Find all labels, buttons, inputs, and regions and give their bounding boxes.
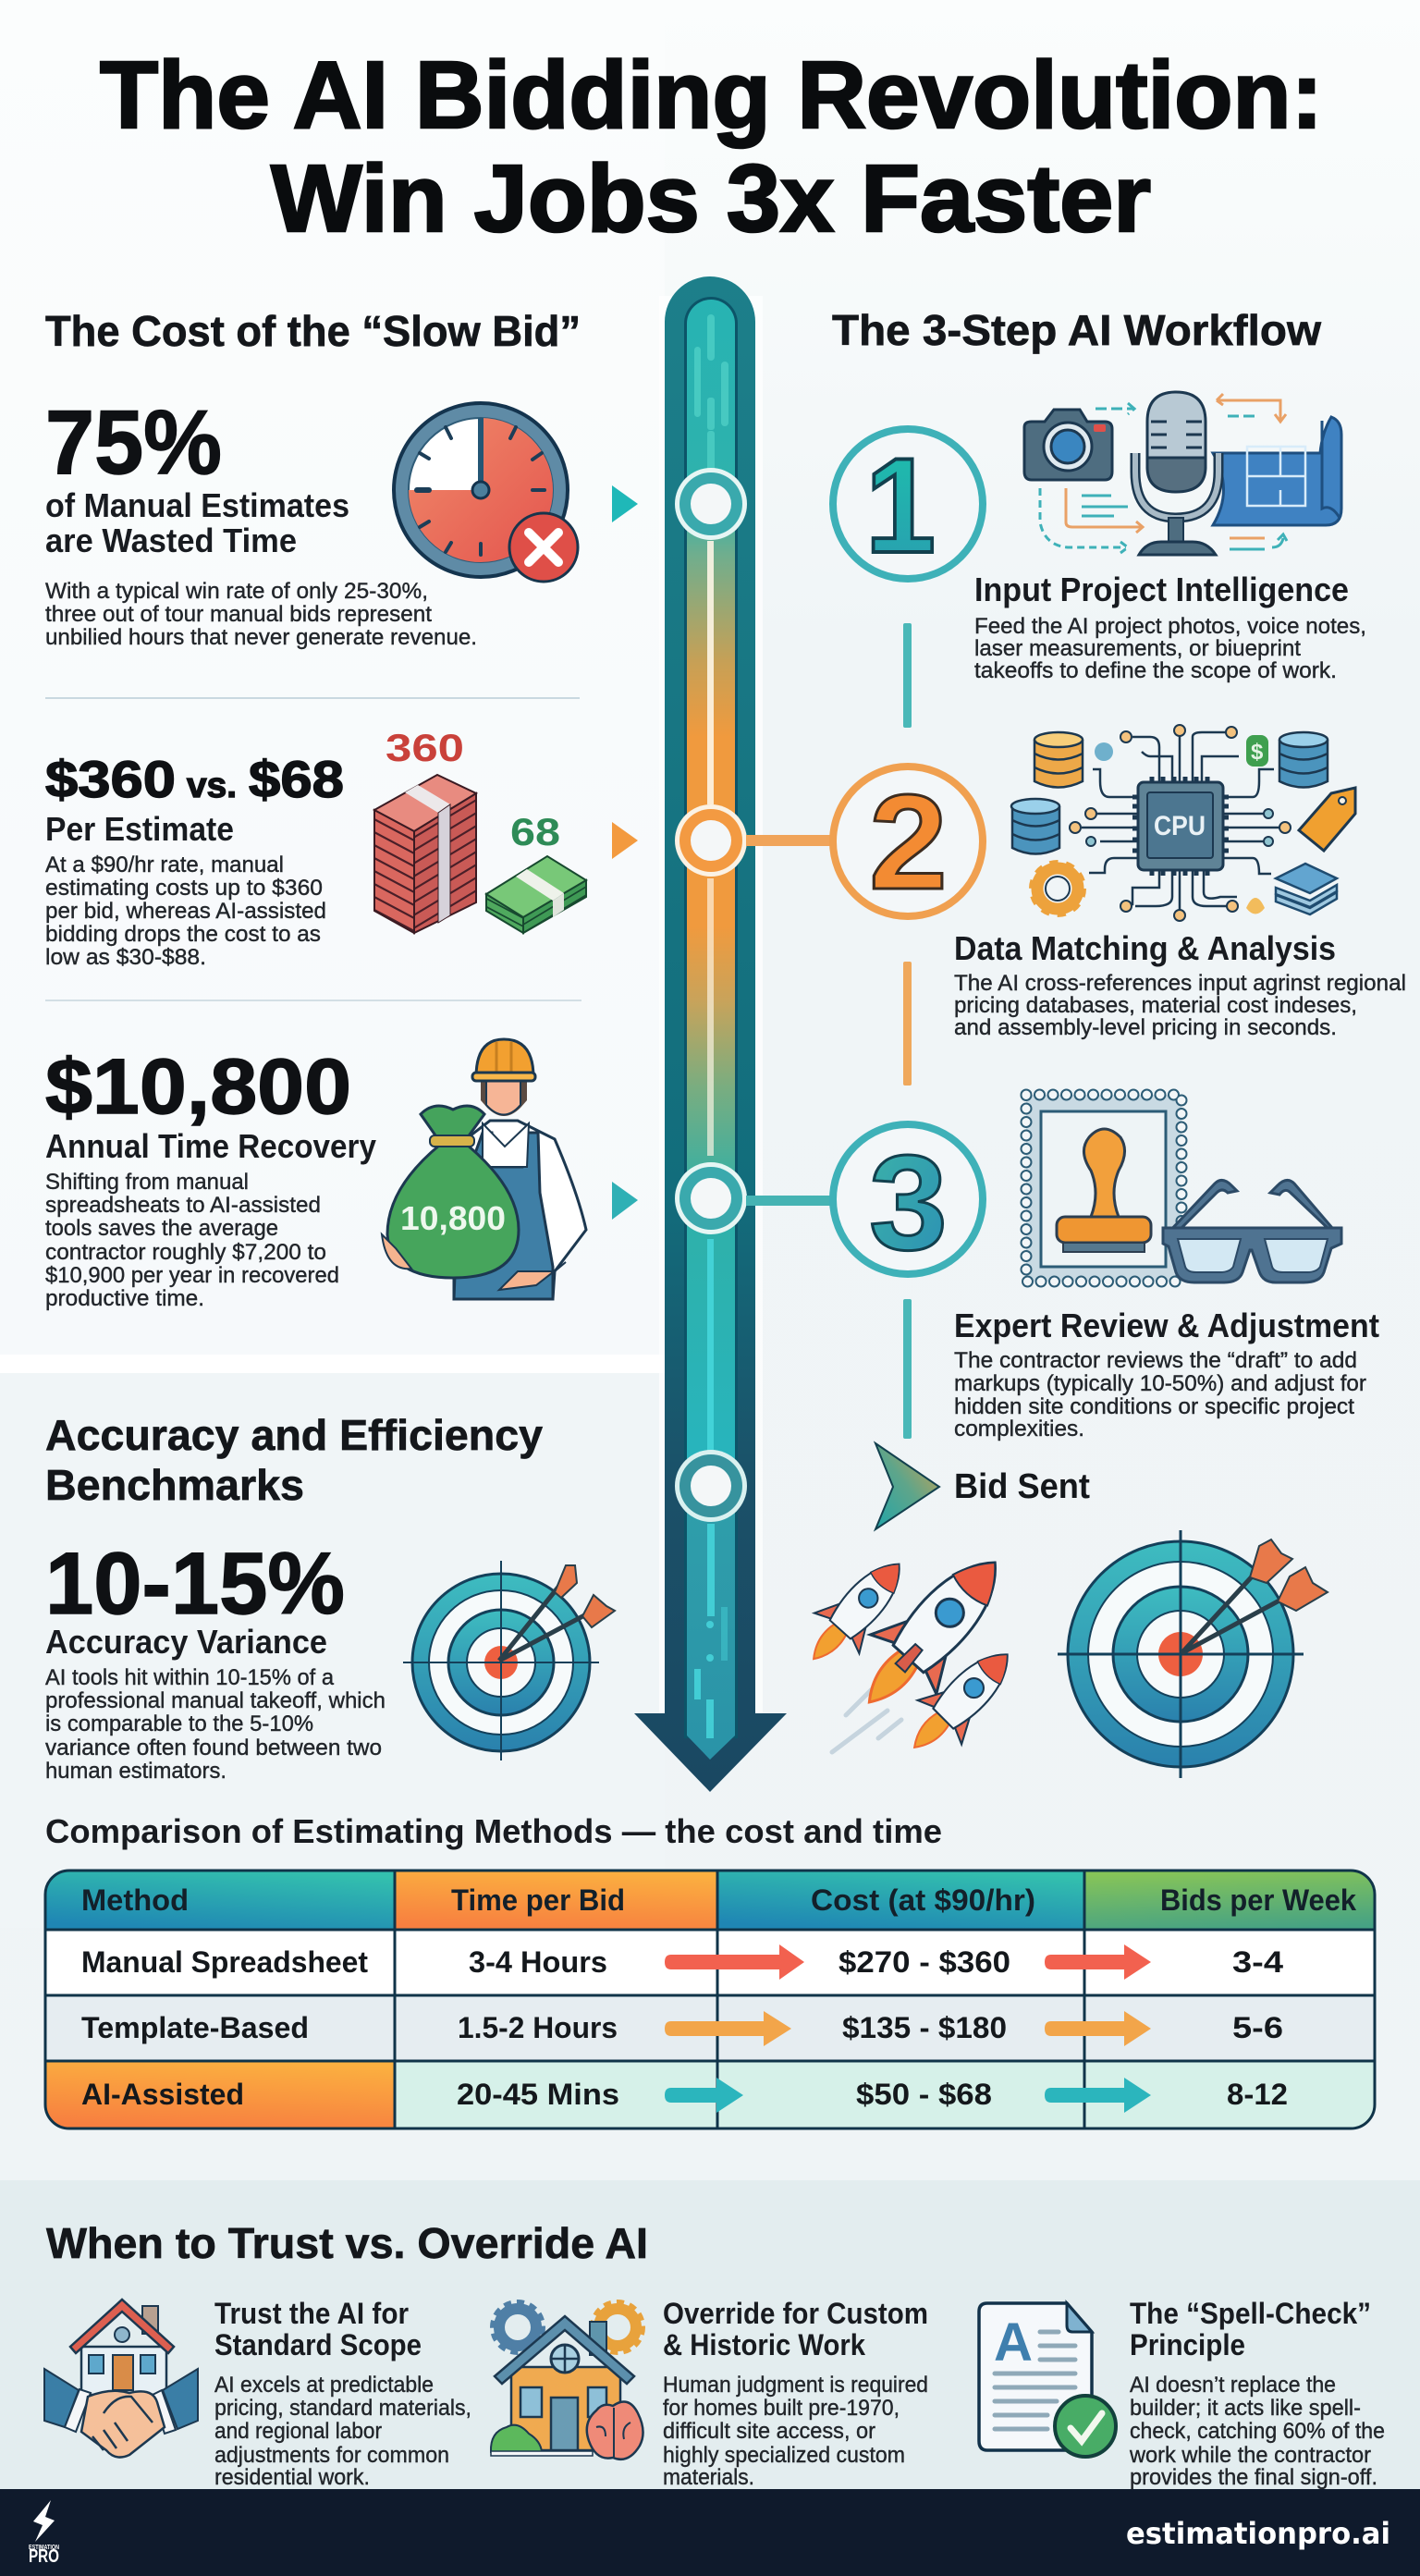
step 1 text: Feed the AI project photos, voice notes, [974,614,1366,639]
stat: 75% block: 75% [45,391,222,493]
title [100,42,1323,251]
icon: document with check: A [994,2312,1033,2373]
timeline node 1 [675,468,747,540]
step 2 text: Data Matching & Analysis [954,929,1336,967]
card: spell-check principle: work while the contractor [1129,2443,1371,2468]
icon: cpu and data network [1011,725,1355,921]
card: trust the ai: Trust the AI for [214,2297,409,2330]
card: override for custom: & Historic Work [663,2328,865,2361]
stat: accuracy variance block: is comparable to the 5-10% [45,1711,313,1736]
icon: clock with x badge [394,403,578,582]
heading: accuracy and efficiency [45,1411,543,1509]
row: manual spreadsheet [81,1944,1283,1980]
panel: trust vs override [0,2180,1420,2490]
icon: worker holding money bag [382,1039,586,1299]
row: ai-assisted [81,2078,1288,2113]
stat: annual time recovery block: spreadsheats to AI-assisted [45,1193,321,1218]
row: template-based: 1.5-2 Hours [458,2011,618,2044]
row: ai-assisted: AI-Assisted [81,2078,244,2111]
row: ai-assisted: 8-12 [1227,2078,1288,2111]
stat: 360 vs 68 block: Per Estimate [45,810,234,848]
bid sent arrow and label: Bid Sent [954,1467,1090,1506]
step 1 text: laser measurements, or biueprint [974,636,1301,661]
table header row: Time per Bid [451,1883,625,1917]
card: spell-check principle: builder; it acts like spell- [1130,2396,1361,2421]
step 2 number: 2 [869,767,948,917]
stat: accuracy variance block [45,1535,386,1784]
row: template-based: 5-6 [1232,2011,1283,2044]
row: ai-assisted: $50 - $68 [856,2078,992,2111]
stat: 360 vs 68 block [45,750,344,970]
row: template-based: Template-Based [81,2011,309,2044]
row: template-based: $135 - $180 [842,2011,1007,2044]
connector 1 to 2 [903,623,912,728]
step 2 text [954,929,1406,1040]
card: spell-check principle: provides the final sign-off. [1130,2465,1377,2490]
step 3 text: hidden site conditions or specific project [954,1394,1354,1419]
stat: 360 vs 68 block: $360 [45,750,176,808]
footer url: estimationpro.ai [1126,2516,1390,2551]
footer logo: ESTIMATION [29,2545,59,2551]
card: trust the ai: and regional labor [214,2419,382,2444]
row: manual spreadsheet: 3-4 Hours [469,1945,607,1979]
card: spell-check principle: AI doesn’t replace the [1130,2373,1336,2398]
central timeline arrow [634,276,787,1792]
card: override for custom: for homes built pre-1970, [663,2396,900,2421]
card: override for custom: Human judgment is required [663,2373,928,2398]
card: trust the ai [214,2297,471,2490]
stat: accuracy variance block: professional manual takeoff, which [45,1688,386,1713]
footer logo [29,2500,59,2567]
heading: trust vs override: When to Trust vs. Override AI [46,2219,648,2267]
row: manual spreadsheet: Manual Spreadsheet [81,1945,368,1979]
step 3 text: Expert Review & Adjustment [954,1306,1379,1344]
stat: annual time recovery block: Shifting from manual [45,1170,249,1195]
card: spell-check principle: check, catching 60% of the [1130,2419,1385,2444]
table heading: Comparison of Estimating Methods — the cost and time [45,1812,942,1850]
icon: green money stack 68: 68 [510,810,560,853]
step 1 text [974,570,1366,683]
card: trust the ai: adjustments for common [214,2443,449,2468]
icon: cpu and data network: CPU [1154,811,1206,841]
icon: cpu and data network: $ [1251,740,1264,765]
step 1 number [833,429,983,581]
stat: 75% block: With a typical win rate of only 25-30%, [45,579,428,604]
stat: annual time recovery block: $10,900 per year in recovered [45,1263,339,1288]
connector node 2 [746,835,834,846]
step 1 text: takeoffs to define the scope of work. [974,658,1337,683]
icon: house and handshake [44,2300,198,2458]
stat: 75% block: unbilied hours that never generate revenue. [45,625,477,650]
step 3 number: 3 [869,1127,948,1278]
icon: red money stack 360 [374,726,476,933]
step 3 number [833,1124,983,1278]
stat: 360 vs 68 block: At a $90/hr rate, manual [45,853,284,877]
comparison table [45,1871,1375,2128]
row: ai-assisted: 20-45 Mins [457,2078,619,2111]
icon: red money stack 360: 360 [386,726,464,769]
row: template-based [81,2011,1283,2046]
stat: annual time recovery block: productive time. [45,1286,204,1311]
stat: 360 vs 68 block: per bid, whereas AI-assisted [45,899,326,924]
heading: cost of slow bid: The Cost of the “Slow Bid” [45,307,581,355]
title: Win Jobs 3x Faster [271,145,1151,251]
connector 2 to 3 [903,962,912,1086]
title: The AI Bidding Revolution: [100,42,1323,148]
heading: accuracy and efficiency: Accuracy and Efficiency [45,1411,543,1459]
stat: annual time recovery block: contractor roughly $7,200 to [45,1240,326,1265]
step 3 text [954,1306,1379,1441]
card: trust the ai: Standard Scope [214,2328,422,2361]
stat: accuracy variance block: AI tools hit within 10-15% of a [45,1665,334,1690]
stat: 360 vs 68 block: vs. [187,767,237,805]
step 1 text: Input Project Intelligence [974,570,1349,608]
connector 3 to bid sent [903,1299,912,1439]
card: spell-check principle: Principle [1130,2328,1245,2361]
stat: accuracy variance block: Accuracy Variance [45,1623,327,1661]
table header row: Bids per Week [1160,1883,1356,1917]
timeline node 3 [675,1162,747,1234]
bid sent arrow and label [875,1443,1090,1529]
icon: house with gears and brain [491,2302,643,2459]
icon: target right [1058,1530,1328,1778]
card: override for custom [663,2297,928,2490]
card: override for custom: materials. [663,2465,754,2490]
stat: 360 vs 68 block: $68 [249,750,344,808]
step 2 number [833,767,983,917]
card: trust the ai: residential work. [214,2465,370,2490]
footer logo: PRO [29,2546,59,2567]
stat: 75% block: three out of tour manual bids represent [45,602,432,627]
card: override for custom: difficult site access, or [663,2419,875,2444]
stat: accuracy variance block: human estimators. [45,1759,226,1784]
step 3 text: complexities. [954,1417,1084,1441]
card: spell-check principle [1129,2297,1385,2490]
stat: annual time recovery block: Annual Time Recovery [45,1127,376,1165]
stat: annual time recovery block: tools saves the average [45,1216,278,1241]
pointer triangles to timeline [612,485,638,1220]
table header row: Method [81,1883,189,1917]
icon: green money stack 68 [486,810,586,933]
footer bar [0,2489,1420,2576]
stat: 360 vs 68 block: low as $30-$88. [45,945,206,970]
card: spell-check principle: The “Spell-Check” [1130,2297,1371,2330]
stat: 75% block: of Manual Estimates [45,486,349,524]
timeline node 2 [675,804,747,877]
timeline node 4 [675,1450,747,1522]
stat: 360 vs 68 block: estimating costs up to $360 [45,876,323,901]
step 3 text: markups (typically 10-50%) and adjust for [954,1371,1366,1396]
card: trust the ai: AI excels at predictable [214,2373,434,2398]
row: manual spreadsheet: 3-4 [1232,1945,1283,1979]
step 2 text: and assembly-level pricing in seconds. [954,1015,1337,1040]
card: trust the ai: pricing, standard materials, [214,2396,471,2421]
stat: 75% block: are Wasted Time [45,521,297,559]
stat: accuracy variance block: 10-15% [45,1535,345,1633]
card: override for custom: highly specialized custom [663,2443,905,2468]
icon: rockets [791,1533,1029,1770]
stat: annual time recovery block: $10,800 [45,1043,351,1130]
table header row [81,1883,1356,1917]
heading: accuracy and efficiency: Benchmarks [45,1461,304,1509]
step 3 text: The contractor reviews the “draft” to add [954,1348,1357,1373]
table header row: Cost (at $90/hr) [811,1883,1035,1917]
step 2 text: The AI cross-references input agrinst regional [954,971,1406,996]
step 1 number: 1 [865,430,936,581]
stat: 75% block [45,391,477,650]
row: manual spreadsheet: $270 - $360 [839,1945,1010,1979]
step 2 text: pricing databases, material cost indeses, [954,993,1357,1018]
icon: worker holding money bag: 10,800 [400,1199,506,1237]
icon: camera microphone blueprint [1024,392,1341,555]
stat: accuracy variance block: variance often found between two [45,1736,382,1760]
stat: 360 vs 68 block: bidding drops the cost to as [45,922,321,947]
stat: annual time recovery block [45,1043,376,1311]
heading: 3-step workflow: The 3-Step AI Workflow [832,306,1321,354]
icon: target left [403,1561,615,1760]
card: override for custom: Override for Custom [663,2297,928,2330]
icon: document with check [979,2303,1116,2457]
connector node 3 [746,1196,834,1206]
icon: approval stamp and glasses [1026,1095,1341,1282]
